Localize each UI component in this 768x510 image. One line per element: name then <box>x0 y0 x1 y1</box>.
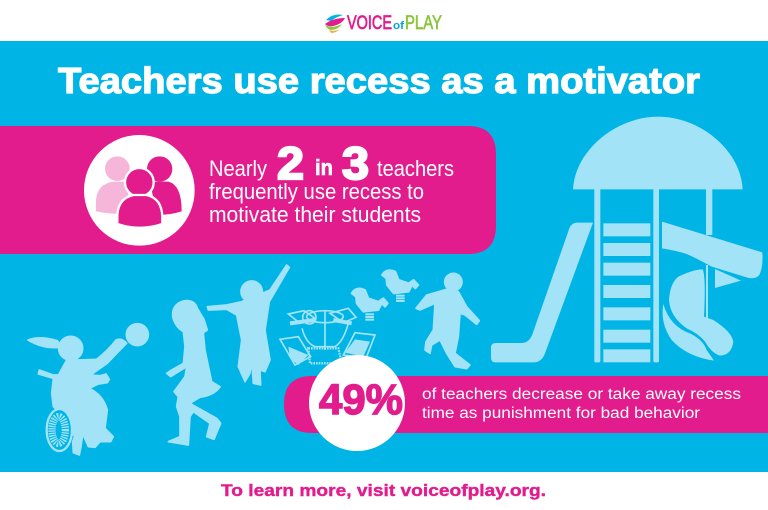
text: nearly 2 in 3 teachers <box>209 138 454 227</box>
title: Teachers use recess as a motivator <box>58 60 700 101</box>
text: nearly 2 in 3 teachers: Nearly <box>209 156 267 181</box>
illustration: spring riders <box>352 270 418 321</box>
text: punishment statistic <box>422 386 741 422</box>
stat circle: 49% <box>309 355 405 451</box>
illustration: child in wheelchair with ball <box>28 324 148 455</box>
logo: Voice of Play: of <box>393 20 404 32</box>
text: nearly 2 in 3 teachers: 3 <box>342 138 369 189</box>
illustration: running boy <box>416 273 479 369</box>
text: punishment statistic: of teachers decrease or take away recess <box>422 386 741 403</box>
text: nearly 2 in 3 teachers: motivate their students <box>209 202 421 227</box>
logo: Voice of Play: PLAY <box>405 13 442 34</box>
panel: 2 in 3 teachers <box>0 126 496 254</box>
logo: Voice of Play <box>325 13 442 34</box>
text: nearly 2 in 3 teachers: teachers <box>377 156 454 181</box>
logo: Voice of Play: VOICE <box>347 13 392 34</box>
illustration: running girl <box>167 301 221 445</box>
icon: group of people <box>84 135 195 246</box>
text: nearly 2 in 3 teachers: 2 <box>277 138 304 189</box>
illustration: jumping boy <box>207 265 289 385</box>
footer call to action: To learn more, visit voiceofplay.org. <box>221 482 546 500</box>
illustration: merry-go-round <box>280 308 375 365</box>
panel: 49% of teachers <box>284 355 768 451</box>
text: punishment statistic: time as punishment for bad behavior <box>422 405 700 422</box>
text: nearly 2 in 3 teachers: frequently use recess to <box>209 179 424 204</box>
stat circle: 49%: 49% <box>319 376 403 424</box>
icon: wheelchair wheel <box>47 409 72 451</box>
text: nearly 2 in 3 teachers: in <box>315 155 333 180</box>
illustration: play structure with slides <box>491 117 763 362</box>
